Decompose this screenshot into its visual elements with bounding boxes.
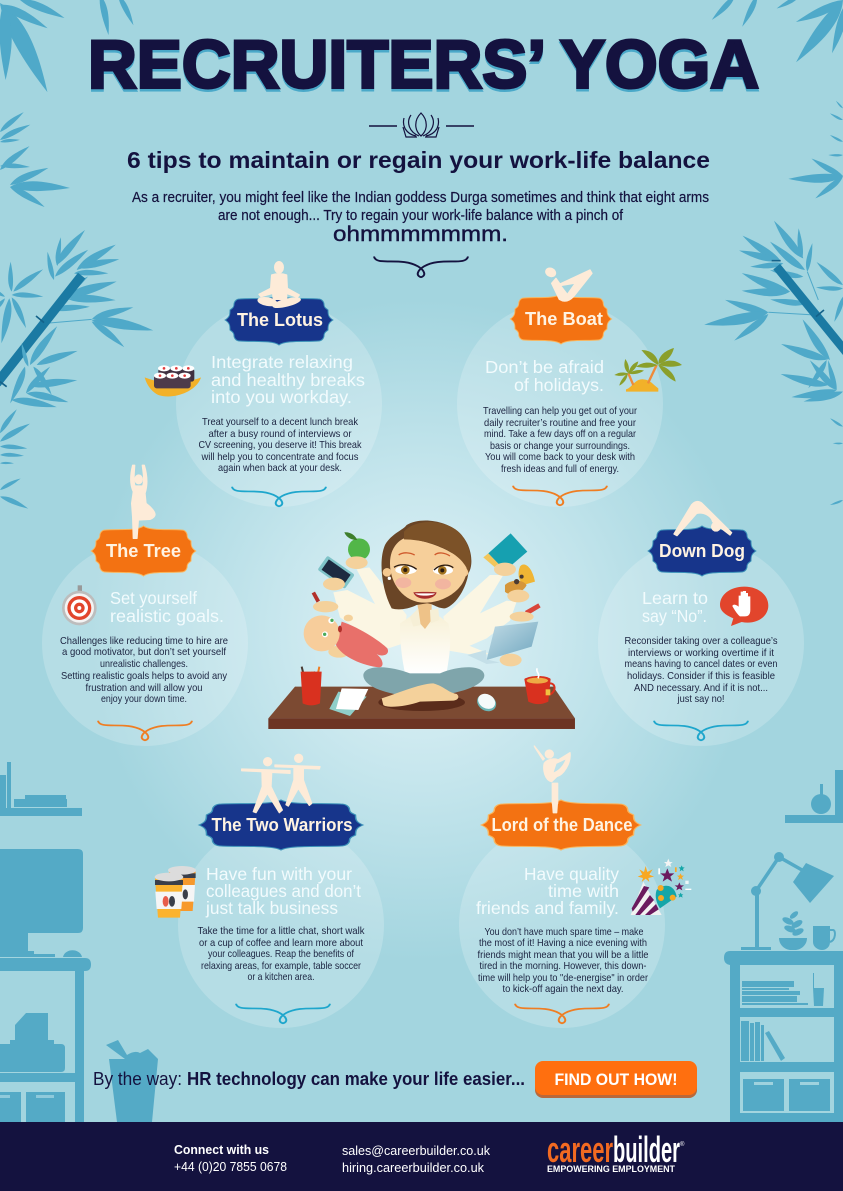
lipstick and hand [312, 592, 338, 612]
eyes [394, 553, 453, 575]
heading: The Two Warriors: colleagues and don’t [206, 881, 361, 901]
intro text: ohmmmmmmm. [333, 223, 508, 246]
footer: email and website: sales@careerbuilder.co.uk [342, 1143, 490, 1158]
legs [363, 667, 484, 695]
badge: The Boat [510, 294, 612, 344]
body: Lord of the Dance: the most of it! Having a nice evening with [479, 938, 647, 949]
body: The Two Warriors: or a kitchen area. [248, 972, 314, 983]
illustration: multitasking woman at desk [268, 520, 575, 729]
game controller and hand [505, 565, 535, 602]
heading: Lord of the Dance: friends and family. [476, 898, 619, 918]
footer: email and website [342, 1143, 490, 1175]
furniture: right cabinet [724, 951, 843, 1122]
title: RECRUITERS’ YOGA [88, 29, 759, 105]
heading: The Two Warriors: just talk business [205, 898, 338, 918]
button: find out how [535, 1061, 697, 1098]
icon: lotus divider [369, 113, 474, 137]
body: The Tree: Challenges like reducing time to hire are [60, 636, 228, 647]
icon: target [62, 585, 97, 625]
body: Lord of the Dance: friends might mean that you will be a little [478, 950, 649, 961]
button: find out how: FIND OUT HOW! [554, 1070, 678, 1089]
icon: boat pose figure [544, 267, 592, 301]
body: The Tree: frustration and will allow you [86, 683, 203, 694]
heading: Down Dog: Learn to [642, 588, 708, 608]
heading: Down Dog: say “No”. [642, 606, 707, 626]
body: The Lotus: Treat yourself to a decent lunch break [202, 417, 359, 428]
bamboo: left large branch [0, 227, 154, 510]
badge: The Lotus: The Lotus [237, 310, 323, 330]
badge: The Tree: The Tree [106, 541, 181, 561]
body: Lord of the Dance: time will help you to "de-energise" in order [478, 973, 648, 984]
badge: Down Dog [648, 526, 756, 576]
arms [333, 567, 517, 657]
heading: The Two Warriors: Have fun with your [206, 864, 352, 884]
bamboo: right branches [703, 100, 843, 506]
intro text: As a recruiter, you might feel like the Indian goddess Durga sometimes and think that eight arms [132, 189, 709, 206]
icon: coffee cups [155, 866, 196, 918]
badge: Lord of the Dance: Lord of the Dance [492, 815, 632, 835]
body: The Lotus: will help you to concentrate and focus [201, 452, 358, 463]
heading: Lord of the Dance [476, 864, 619, 918]
bamboo: left small cluster [0, 110, 70, 209]
icon: party hat and confetti [631, 859, 691, 915]
body: The Two Warriors: your colleagues. Reap the benefits of [208, 949, 354, 960]
body: The Boat: mind. Take a few days off on a regular [484, 429, 636, 440]
body: Down Dog: just say no! [677, 694, 724, 705]
heading: The Tree: realistic goals. [110, 606, 224, 626]
icon: sushi [145, 365, 201, 396]
central glow [91, 300, 751, 960]
body: Down Dog: AND necessary. And if it is not... [634, 683, 768, 694]
body: The Boat: fresh ideas and full of energy. [501, 464, 619, 475]
title: RECRUITERS’ YOGA [88, 26, 759, 102]
laptop and hand [467, 622, 538, 666]
body: Lord of the Dance [478, 927, 649, 995]
torso [400, 617, 450, 673]
footer [0, 1122, 843, 1191]
heading: The Lotus: Integrate relaxing [211, 352, 353, 372]
panel: The Lotus [145, 262, 382, 507]
body: The Boat [483, 406, 637, 475]
body: The Boat: daily recruiter’s routine and free your [484, 418, 636, 429]
USB stick and hand [510, 603, 541, 622]
badge: Lord of the Dance [481, 800, 641, 850]
baby [304, 615, 388, 667]
neck and collar [410, 598, 439, 629]
heading: The Tree [110, 588, 224, 626]
flourish: The Tree [98, 721, 192, 740]
heading: Lord of the Dance: Have quality [524, 864, 619, 884]
footer: careerbuilder logo: builder [613, 1129, 680, 1170]
badge: The Tree [91, 526, 196, 576]
icon: palm island [614, 348, 682, 392]
flourish: intro [374, 256, 468, 277]
body: The Tree [60, 636, 228, 705]
mouth [413, 592, 437, 599]
badge: The Two Warriors: The Two Warriors [212, 815, 352, 835]
heading: The Tree: Set yourself [110, 588, 197, 608]
computer mouse [474, 691, 499, 715]
furniture: right shelf with vase [785, 770, 843, 823]
heading: The Boat: of holidays. [514, 375, 604, 395]
body: The Lotus: CV screening, you deserve it! This break [198, 440, 362, 451]
body: Lord of the Dance: tired in the morning. However, this down- [480, 961, 646, 972]
subtitle: 6 tips to maintain or regain your work-life balance [127, 147, 710, 173]
heading: Lord of the Dance: time with [548, 881, 619, 901]
heading: The Two Warriors [205, 864, 361, 918]
furniture: left shelf with books [0, 762, 82, 816]
footer: careerbuilder logo: EMPOWERING EMPLOYMENT [547, 1164, 675, 1175]
bamboo: top right leaves [710, 0, 843, 67]
footer: careerbuilder logo: career [547, 1129, 613, 1170]
footer: contact phone [174, 1142, 287, 1174]
body: Down Dog: means having to cancel dates or even [624, 659, 778, 670]
footer: careerbuilder logo: ® [680, 1141, 685, 1148]
panel: Lord of the Dance [459, 746, 691, 1028]
flourish: The Lotus [232, 487, 326, 506]
hair back [382, 520, 471, 609]
body: Lord of the Dance: You don’t have much spare time – make [484, 927, 644, 938]
body: The Tree: unrealistic challenges. [100, 659, 188, 670]
icon: two warriors figures [242, 754, 320, 813]
footer: email and website: hiring.careerbuilder.co.uk [342, 1160, 484, 1175]
badge: Down Dog: Down Dog [659, 541, 745, 561]
heading: The Boat: Don’t be afraid [485, 357, 604, 377]
panel: Down Dog [598, 502, 804, 746]
tea mug [524, 668, 555, 704]
hair fringe [404, 522, 471, 572]
panel: The Two Warriors [155, 754, 384, 1028]
cheeks [395, 577, 451, 589]
body: Down Dog: holidays. Consider if this is feasible [627, 671, 775, 682]
icon: down dog figure [674, 502, 732, 536]
face [390, 538, 467, 603]
pen cup [301, 667, 322, 705]
panel: The Boat [457, 267, 682, 507]
icon: dancer figure [534, 746, 570, 813]
body: Down Dog [624, 636, 778, 705]
badge: The Two Warriors [199, 800, 363, 850]
body: The Two Warriors [198, 926, 365, 983]
paper [329, 688, 368, 716]
body: Down Dog: Reconsider taking over a colleague’s [624, 636, 778, 647]
body: The Lotus [198, 417, 362, 474]
footer: careerbuilder logo [547, 1129, 685, 1175]
panel: The Tree [42, 465, 248, 746]
body: The Tree: a good motivator, but don’t set yourself [62, 647, 226, 658]
furniture: left desk with computer and printer [0, 849, 91, 1122]
feet [382, 683, 458, 707]
body: The Lotus: after a busy round of interviews or [208, 429, 352, 440]
badge: The Lotus [225, 295, 333, 345]
footer: contact phone: Connect with us [174, 1142, 269, 1157]
furniture: desk lamp [741, 852, 834, 950]
heading: The Boat [485, 357, 604, 395]
intro text [132, 189, 709, 246]
apple and hand [344, 532, 370, 569]
body: The Lotus: again when back at your desk. [218, 463, 342, 474]
desk [268, 687, 575, 729]
body: The Tree: Setting realistic goals helps to avoid any [61, 671, 228, 682]
heading: The Lotus: and healthy breaks [211, 370, 365, 390]
flourish: Lord of the Dance [515, 1004, 609, 1023]
intro text: are not enough... Try to regain your work-life balance with a pinch of [218, 207, 624, 224]
call to action text: By the way: [93, 1069, 182, 1089]
body: The Boat: You will come back to your desk with [485, 452, 635, 463]
body: The Tree: enjoy your down time. [101, 694, 187, 705]
heading: Down Dog [642, 588, 708, 626]
heading: The Lotus [211, 352, 365, 407]
icon: lotus pose figure [257, 262, 301, 309]
call to action text: HR technology can make your life easier... [187, 1069, 525, 1089]
heading: The Lotus: into you workday. [211, 387, 352, 407]
body: Lord of the Dance: to kick-off again the next day. [502, 984, 624, 995]
ears [383, 568, 468, 580]
book and hand [483, 533, 527, 576]
flourish: The Two Warriors [236, 1004, 330, 1023]
flourish: The Boat [513, 486, 607, 505]
icon: tree pose figure [131, 465, 155, 538]
footer: contact phone: +44 (0)20 7855 0678 [174, 1159, 287, 1174]
bamboo: top left leaves [0, 0, 137, 95]
flourish: Down Dog [654, 721, 748, 740]
icon: stop hand speech bubble [720, 587, 768, 626]
furniture: waste bin [106, 1040, 158, 1122]
body: The Two Warriors: relaxing areas, for example, table soccer [201, 961, 361, 972]
body: The Boat: Travelling can help you get out of your [483, 406, 637, 417]
body: Down Dog: interviews or working overtime if it [628, 648, 774, 659]
phone and hand [318, 556, 355, 590]
furniture: plant and mug [779, 910, 835, 950]
body: The Boat: basis or change your surroundings. [490, 441, 630, 452]
body: The Two Warriors: or a cup of coffee and learn more about [199, 938, 363, 949]
body: The Two Warriors: Take the time for a little chat, short walk [198, 926, 365, 937]
badge: The Boat: The Boat [525, 309, 603, 329]
